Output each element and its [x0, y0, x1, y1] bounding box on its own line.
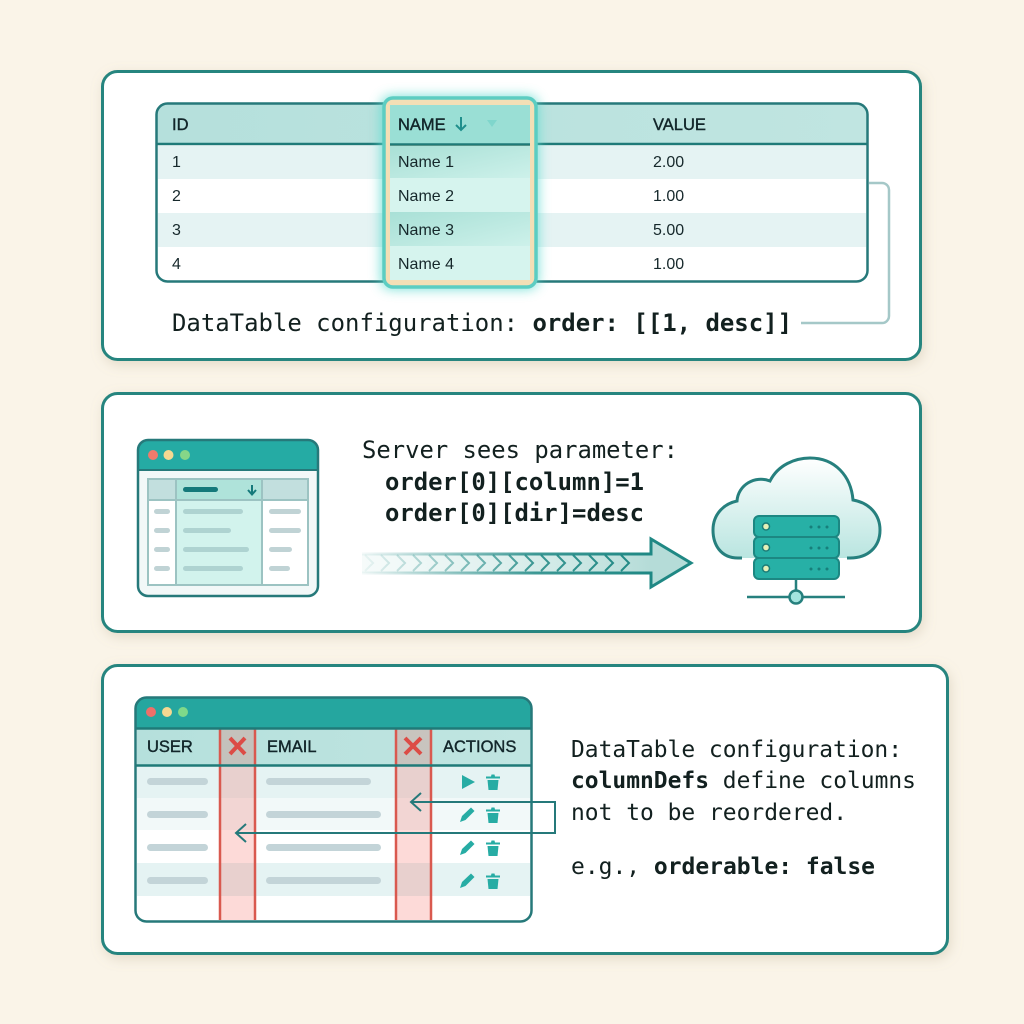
placeholder rows [147, 778, 381, 884]
panel: server parameter flow [102, 394, 920, 632]
browser window icon [138, 440, 318, 596]
server parameter text: Server sees parameter: [362, 436, 678, 464]
config text: DataTable configuration: order: [[1, desc]] [172, 309, 792, 337]
name cells: Name 4 [398, 256, 454, 273]
name cells [398, 154, 454, 273]
row values: 2.00 [653, 154, 684, 171]
config explanation text: columnDefs define columns [571, 768, 916, 794]
config explanation text [571, 737, 916, 880]
server parameter text: order[0][column]=1 [385, 468, 644, 496]
config explanation text: e.g., orderable: false [571, 854, 875, 880]
column header: VALUE: VALUE [653, 116, 706, 134]
server parameter text: order[0][dir]=desc [385, 499, 644, 527]
table window [136, 698, 532, 922]
config explanation text: not to be reordered. [571, 800, 847, 826]
column headers: EMAIL [267, 738, 317, 756]
icon: red crosses [230, 738, 421, 754]
column headers [147, 738, 516, 756]
icon: sort caret [487, 120, 497, 127]
reorder arrows [236, 793, 555, 842]
column headers: USER [147, 738, 193, 756]
arrow to server [362, 539, 691, 587]
icon: cloud server [713, 458, 880, 604]
icon: sort down arrow [456, 117, 466, 130]
row values: 5.00 [653, 222, 684, 239]
column header: ID: ID [172, 116, 189, 134]
config explanation text: DataTable configuration: [571, 737, 902, 763]
row ids: 2 [172, 188, 181, 205]
column header: NAME: NAME [398, 116, 446, 134]
row ids [172, 154, 181, 273]
data table [156, 104, 868, 282]
row ids: 1 [172, 154, 181, 171]
row values: 1.00 [653, 256, 684, 273]
name cells: Name 3 [398, 222, 454, 239]
panel: client-side order configuration [102, 72, 920, 360]
row values [653, 154, 684, 273]
column headers: ACTIONS [443, 738, 516, 756]
name cells: Name 1 [398, 154, 454, 171]
server parameter text [362, 436, 678, 527]
connector line [801, 183, 889, 323]
non-orderable column bands [219, 728, 431, 920]
row ids: 3 [172, 222, 181, 239]
row values: 1.00 [653, 188, 684, 205]
name cells: Name 2 [398, 188, 454, 205]
highlighted NAME column [381, 96, 538, 289]
row ids: 4 [172, 256, 181, 273]
action icons [460, 774, 500, 889]
panel: non-orderable columns [102, 666, 948, 954]
